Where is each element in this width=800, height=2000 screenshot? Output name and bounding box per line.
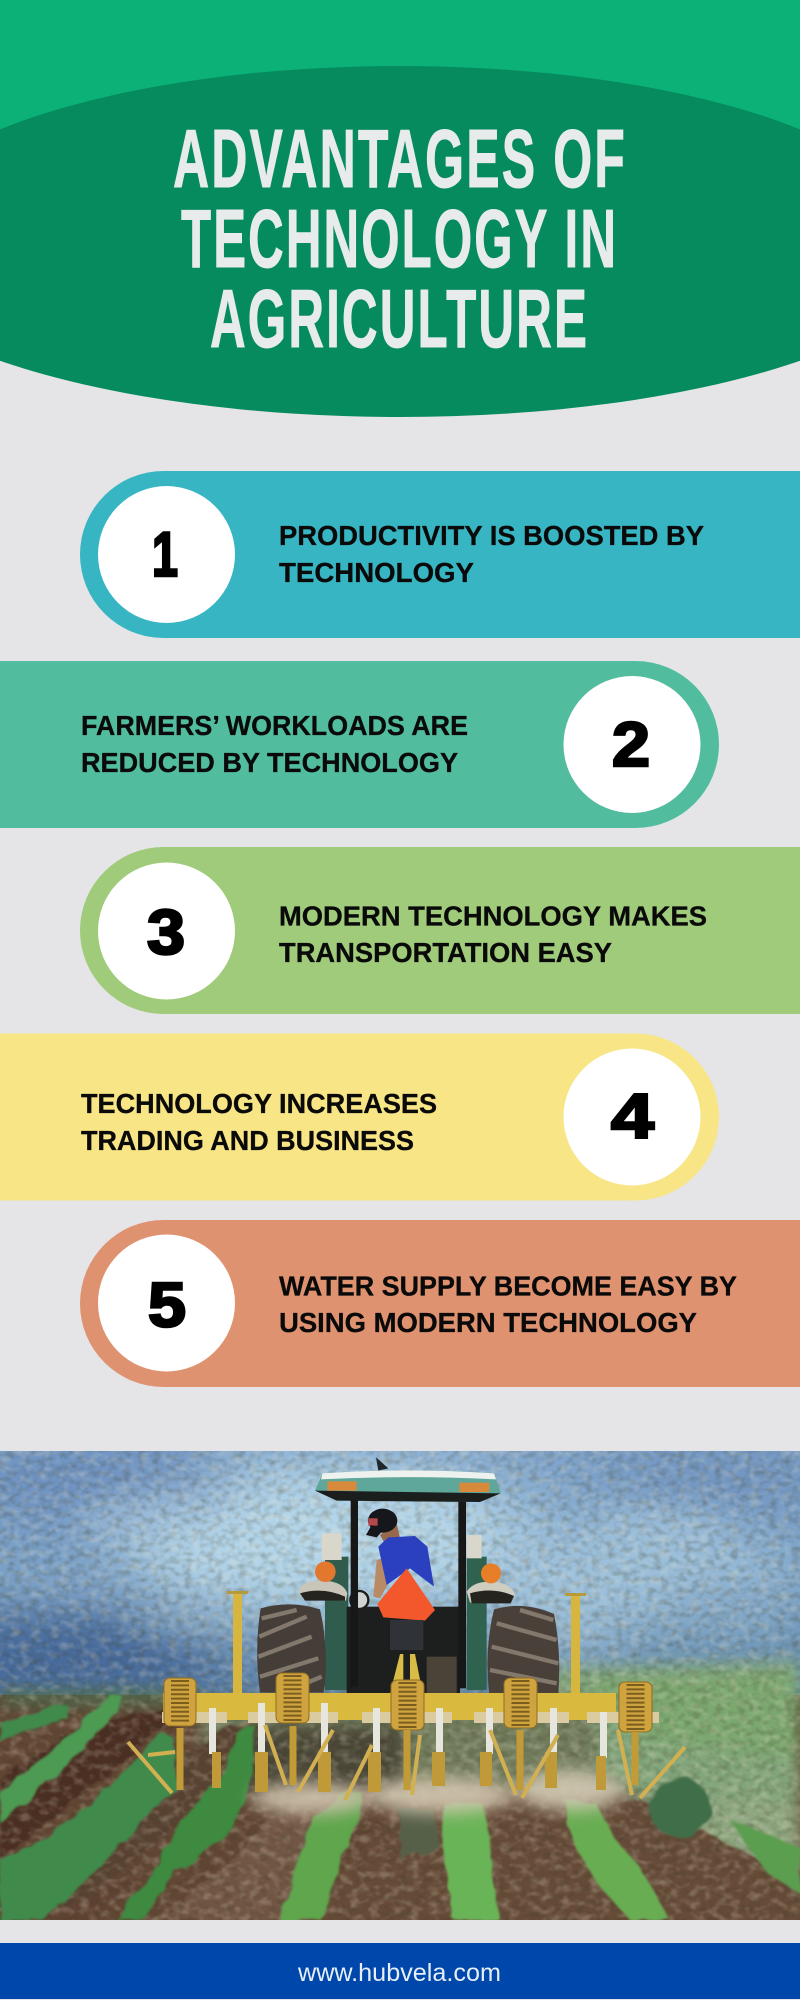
panel: item 1: TECHNOLOGY [279, 557, 474, 588]
poles [233, 1594, 242, 1694]
cab pillars [350, 1500, 358, 1608]
spring units [164, 1673, 652, 1732]
title [173, 113, 627, 365]
cultivator [128, 1591, 685, 1800]
panel: item 3: MODERN TECHNOLOGY MAKES [279, 900, 707, 932]
panel: item 4: TRADING AND BUSINESS [81, 1125, 414, 1156]
panel: item 5: 5 [148, 1270, 186, 1340]
field [0, 1660, 800, 1920]
photo: tractor cultivating a field [0, 1440, 800, 1920]
sky [0, 1440, 800, 1711]
panel: item 1: 1 [152, 520, 178, 590]
panel: item 2: FARMERS’ WORKLOADS ARE [81, 710, 468, 741]
braces [128, 1725, 685, 1800]
panel: item 1 [80, 471, 800, 638]
roof [376, 1457, 388, 1471]
panel: item 2 [0, 661, 719, 828]
panel: item 4: TECHNOLOGY INCREASES [81, 1088, 437, 1119]
panel: item 3: 3 [147, 898, 185, 968]
fenders and lamps [298, 1581, 347, 1601]
bar [163, 1693, 616, 1720]
tractor [257, 1457, 559, 1694]
panel: item 3 [80, 847, 800, 1014]
panel: item 5 [80, 1220, 800, 1387]
panel: item 5: USING MODERN TECHNOLOGY [279, 1307, 697, 1338]
header ellipse [0, 66, 800, 417]
panel: item 4 [0, 1034, 719, 1200]
panel: item 2: REDUCED BY TECHNOLOGY [81, 747, 458, 778]
shanks [209, 1703, 607, 1758]
hitch [390, 1654, 423, 1693]
panel: item 1: PRODUCTIVITY IS BOOSTED BY [279, 520, 704, 551]
footer bar [0, 1943, 800, 1999]
panel: item 3: TRANSPORTATION EASY [279, 937, 612, 968]
panel: item 5: WATER SUPPLY BECOME EASY BY [279, 1270, 737, 1302]
rear body [325, 1557, 348, 1690]
slow-moving sign [377, 1568, 435, 1621]
tyres [257, 1604, 326, 1693]
crop rows [0, 1695, 800, 1920]
soil furrows [0, 1700, 800, 1920]
footer url: www.hubvela.com [297, 1959, 501, 1987]
header band [0, 0, 800, 242]
driver [373, 1557, 388, 1598]
panel: item 4: 4 [611, 1082, 654, 1152]
panel: item 2: 2 [612, 710, 650, 780]
dust cloud [250, 1770, 625, 1814]
